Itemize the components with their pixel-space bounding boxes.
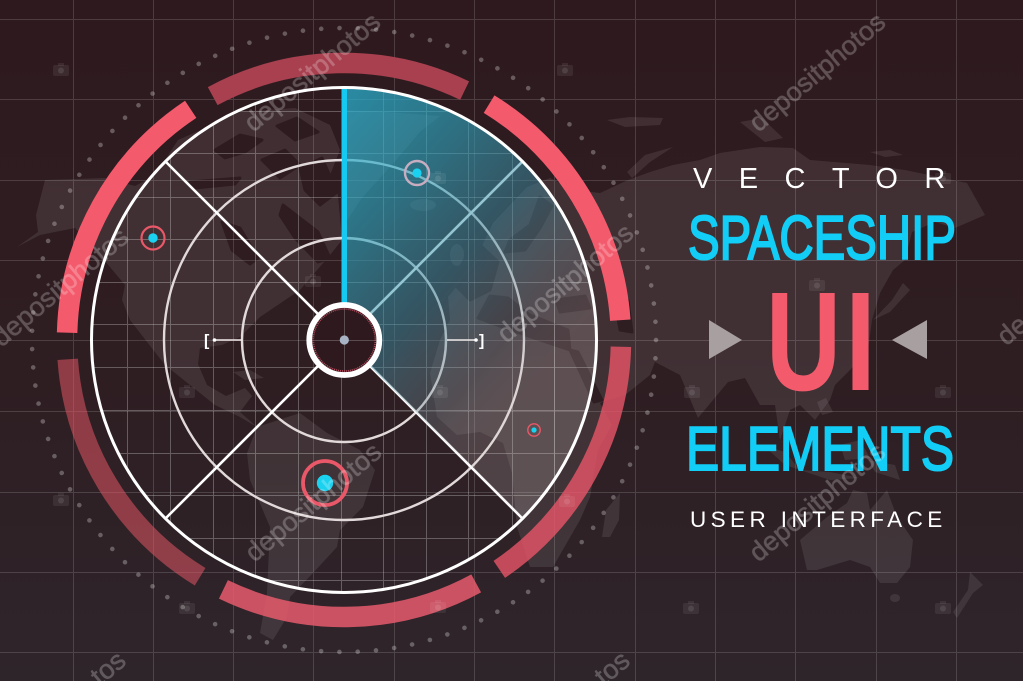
radar diagonal spokes [166,162,522,518]
hub [309,305,379,375]
right range marker: ] [479,332,484,350]
watermarks: depositphotos [239,436,387,568]
watermarks: depositphotos [491,217,639,349]
map: land masses [17,108,985,640]
ring segment: bottom [223,583,476,617]
dotted orbit ring [32,28,656,652]
ring segment: lower right [499,347,621,569]
map: inland seas and channels [190,118,632,402]
ring segment: upper left [67,109,191,333]
radar range rings [164,160,524,520]
ring segment: upper right [489,104,620,320]
arrow: right triangle [892,320,927,359]
watermarks: depositphotos [743,436,891,568]
radar fine grid [94,89,594,591]
outer segmented ring [67,63,621,617]
title: ELEMENTS: ELEMENTS [686,415,954,484]
watermarks: depositphotos [743,6,891,138]
left range marker [204,332,242,350]
watermark camera icons [53,63,951,614]
title: UI: I [845,262,876,420]
blip: bottom large [303,461,347,505]
right range marker [447,332,484,350]
left range marker: [ [204,332,210,350]
subtitle: USER INTERFACE: USER INTERFACE [690,507,947,532]
blip: upper left [142,226,164,250]
watermarks: depositphotos [238,6,386,138]
sweep lead line [342,88,347,304]
title: VECTOR: VECTOR [693,163,972,195]
blip: upper right [405,161,429,185]
title: UI: U [766,262,841,420]
radar outer circle [92,88,596,592]
arrow: left triangle [709,320,742,359]
ring segment: top [213,63,465,96]
blip: lower right [528,424,540,436]
ring segment: lower left [68,359,200,577]
radar sweep sector [344,88,596,518]
world map [17,108,985,640]
